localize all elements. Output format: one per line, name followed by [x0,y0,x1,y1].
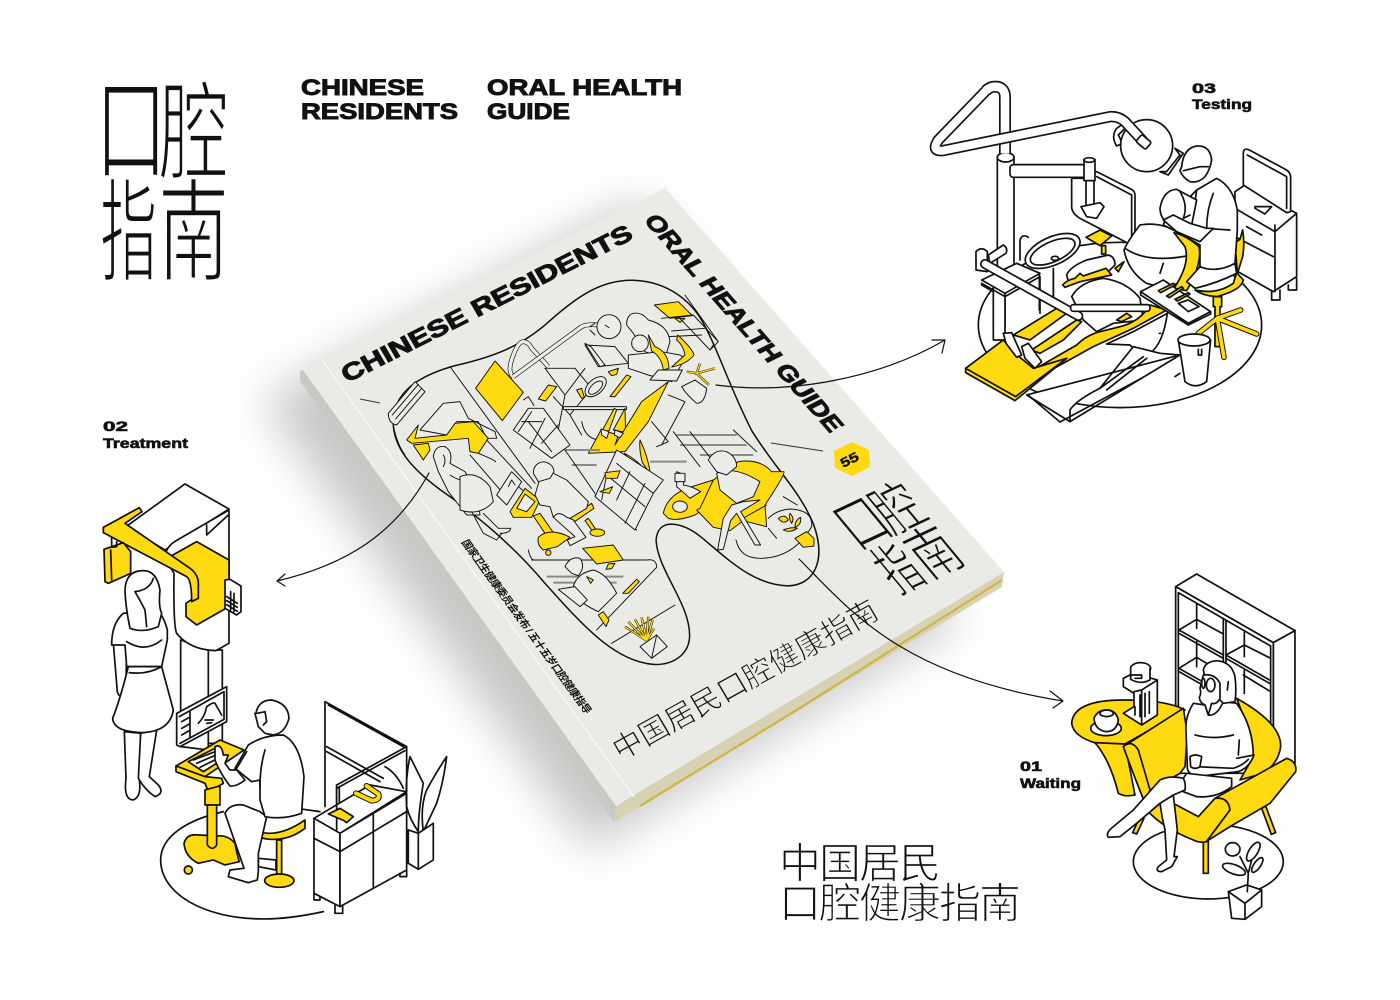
logo: 口腔指南: 指 [100,171,157,296]
lower cabinet [513,408,570,458]
book page edge highlight [640,580,1002,806]
heading: Chinese Residents: CHINESE [301,75,424,100]
stool backrest [1232,230,1244,274]
book mockup [300,188,1004,822]
testing middle parts [1013,146,1257,371]
patient head [632,335,648,352]
illustration: 03 testing scene [935,87,1297,422]
cloud base [538,532,570,550]
cover title: Oral Health Guide: ORAL HEALTH GUIDE [638,211,849,436]
lamp holder [590,323,609,335]
woman body [1186,702,1253,777]
bar column [976,249,987,272]
tooth outline [393,280,819,665]
yellow star inner [687,363,715,385]
label: 01 Waiting: Waiting [1020,775,1081,791]
arrow to 03 testing [716,340,945,388]
feet [601,429,623,438]
cabinet [314,785,407,913]
woman line [443,455,467,480]
pedestal [533,513,555,538]
glass post front [336,785,338,830]
woman legs [472,512,511,540]
yellow card [328,808,353,823]
plant fan [625,617,654,641]
label: 02 Treatment: 02 [103,418,128,434]
yellow desk [510,488,540,517]
cube shelf lines [602,463,653,523]
stool [570,503,597,533]
illustration: 01 waiting scene [1072,574,1296,919]
waiting background items [1072,574,1295,899]
pot line [652,635,657,658]
cover logo: 口腔指南 [820,470,977,606]
pedestal [205,786,220,805]
yellow U object [356,786,379,801]
dental arm top [513,325,605,377]
lamp joint [1136,134,1151,150]
cover badge: 55 [834,442,870,476]
testing back parts [935,87,1297,408]
xray box yellow [413,443,430,460]
body lower [628,352,685,382]
doctor pants [1187,263,1237,288]
stool legs [1198,310,1257,357]
yellow legs [602,408,626,432]
bottom Chinese title: 中国居民 [779,840,941,887]
dental arm top inner [513,325,605,377]
plant yellow [624,440,651,476]
hands [215,746,245,786]
flower [778,513,801,531]
yellow monitor [654,302,692,318]
chair left panel [1123,708,1187,800]
yellow arm rest [1063,262,1124,287]
arrow to 02 treatment [277,473,429,586]
side tray [1141,280,1211,325]
glasses left [1202,678,1205,688]
torso lines [1125,248,1187,273]
bottom monitor [583,545,623,564]
label: 02 Treatment [103,418,188,451]
book spine edge [300,370,616,822]
basin inner [586,379,605,397]
yellow box [538,385,557,401]
doctor head [533,462,554,482]
gray shelf lines [565,435,753,465]
xray-side panel [497,472,522,505]
yellow crossbar [103,508,198,602]
horizontal bar [1071,305,1150,311]
arm post [1081,158,1104,218]
small yellow tray [1086,230,1112,254]
waiting chair [697,461,784,531]
floor lines [518,430,757,643]
label: 03 Testing [1192,80,1252,112]
wheel [184,866,192,874]
lamp [597,315,621,339]
post [585,343,605,367]
grinder [677,472,701,498]
waiting woman [717,471,760,503]
sink [1020,226,1085,310]
doctor hand [1163,215,1213,242]
bin [1175,334,1211,386]
woman head [708,451,737,475]
treatment machine and woman [103,484,323,919]
waiting chair and woman [1107,661,1296,873]
label: 03 Testing: Testing [1192,96,1252,112]
cover title: Chinese Residents: CHINESE RESIDENTS [336,220,638,388]
tray monitor [585,345,628,367]
arrow to 01 waiting [799,559,1063,708]
treatment desk and doctor [176,687,407,913]
horizontal arm [1010,165,1087,177]
book page edge [614,572,1004,822]
coffee machine [675,473,685,482]
machine yellow block [170,542,229,625]
lamp head [1114,120,1183,175]
logo: 口腔指南: 腔 [159,75,229,195]
dental arm inner [510,342,548,377]
book shadow [262,200,960,850]
floor circle [978,242,1262,408]
machine body [126,484,229,651]
floor lines [392,295,718,483]
cube shelf [595,450,663,530]
monitor stand [675,318,685,322]
logo: 口腔指南: 口 [95,67,167,195]
panel art [508,480,515,487]
bin [682,380,707,403]
cover hinge line [322,360,634,797]
heading: Oral Health Guide: GUIDE [487,99,570,124]
floor circle [1133,824,1283,899]
doctor [627,313,670,358]
doctor mask [1183,167,1208,171]
keyboard [517,494,535,512]
cover logo: 口腔指南: 腔 [858,474,940,545]
bottom person [573,570,617,612]
person head [565,558,583,576]
crossed leg [1107,777,1185,837]
hair [1203,661,1236,703]
heading: Oral Health Guide: ORAL HEALTH [487,75,682,100]
logo: 口腔指南 [95,67,229,296]
stool stem [1213,297,1222,347]
stool legs inner [1198,310,1257,357]
chair back [1237,698,1281,780]
patient lap [1072,278,1143,332]
woman standing [433,446,480,515]
yellow star [687,363,715,385]
yellow panel [476,361,523,421]
chair seat [1147,798,1230,842]
cover logo: 口腔指南: 南 [892,516,977,590]
cover vertical subtitle: 国家卫生健康委员会发布 / 五十五岁口腔健康指导 [458,537,595,716]
basin [581,373,610,401]
yellow band [648,335,669,370]
legs [225,805,267,883]
column lines [181,640,222,750]
waiting table [663,480,713,519]
wheel [546,550,551,555]
cup [1190,755,1202,768]
patient hair line [1180,192,1190,218]
stool base [590,529,605,536]
head [255,700,289,735]
bottom shelves [547,577,623,583]
yellow curved band [1174,233,1200,291]
testing front parts [966,245,1211,422]
teapot [1091,710,1121,736]
skirt [1183,773,1232,797]
head holder [104,538,131,583]
plant [385,757,447,869]
yellow pot [795,532,814,547]
seated doctor [535,473,588,518]
cover badge: 55: 55 [838,449,861,471]
face [1199,675,1220,715]
back shoe [258,858,276,870]
lower base extension [1028,378,1142,422]
frame [545,368,592,455]
tray [650,370,682,381]
triangular arm vertical [986,87,1005,153]
label: 01 Waiting: 01 [1020,758,1042,774]
bottom Chinese title [779,840,1021,927]
heading: Chinese Residents: RESIDENTS [301,99,458,124]
person arm [558,587,587,607]
patient torso [1124,224,1200,285]
head lines [257,712,267,725]
chair wave [1033,305,1167,371]
cover illustration upper [388,295,718,515]
triangular arm vertical inner [986,87,1005,153]
cover logo: 口腔指南: 口 [820,486,906,561]
label: 02 Treatment: Treatment [103,435,188,451]
grinder [1123,663,1157,725]
triangular arm inner [935,91,1145,151]
cover illustration lower [460,430,814,658]
hook [523,397,534,406]
label: 01 Waiting [1020,758,1081,791]
control panel [225,579,241,615]
chair body [582,395,685,447]
monitor stand [606,563,615,569]
bottom Chinese title: 口腔健康指南 [779,880,1021,927]
chair line [740,497,797,538]
floor circle [161,809,323,919]
teapot [673,501,687,512]
body lines [237,750,265,787]
base stem [207,805,217,848]
chair under [1107,313,1167,354]
yellow leg stripes [1013,308,1067,340]
cover title in Chinese: 中国居民口腔健康指南 [607,595,884,767]
floor curve [736,509,812,558]
glasses [1206,678,1215,692]
woman [112,571,173,800]
foot bits [1117,313,1132,322]
column [993,153,1014,327]
tie [587,577,593,583]
radiator [388,382,425,425]
doctor body [1163,178,1237,269]
long bar [985,264,1078,316]
illustration: 02 treatment scene [103,484,447,919]
console [176,740,244,792]
patient arm [1067,255,1115,282]
flower [1221,840,1265,919]
footrest [966,340,1067,401]
cabinet [1235,185,1297,300]
stool [253,820,305,887]
patient head [1160,189,1197,228]
platform [982,263,1053,340]
shelf [662,315,718,350]
book cover [303,188,1004,806]
xray box [420,402,497,438]
stool seat [1195,273,1243,297]
screen [177,687,227,747]
hair line [1227,682,1228,690]
woman legs [718,500,761,550]
body lines [1195,735,1254,768]
doctor body [235,735,304,818]
xray column [470,440,532,492]
logo: 口腔指南: 南 [158,170,229,296]
cover mark right [771,443,823,451]
tube [563,407,627,410]
cover mark left [360,399,380,403]
yellow leg stripe 2 [1032,320,1082,353]
yellow hook [672,335,694,367]
label: 03 Testing: 03 [1192,80,1216,96]
bookshelf [1176,574,1295,773]
back leg [1157,795,1177,872]
xray yellow [407,422,488,453]
under dot [1159,332,1161,334]
glass panel [325,702,407,830]
heading: Oral Health Guide [487,75,682,124]
small yellow book [623,579,639,593]
chair right arm [1207,758,1296,841]
chair base [1027,347,1180,422]
back monitor [1243,149,1291,214]
yellow bracket [577,368,631,398]
doctor lines [1193,190,1230,230]
dental arm [510,342,548,377]
woman skirt [460,475,493,512]
cabinet lines [518,412,558,452]
doctor legs [553,514,586,546]
triangular arm [935,91,1145,151]
shelf yellow [600,471,620,493]
cloud base [184,835,239,865]
table [1072,700,1185,796]
shoes [1003,333,1042,368]
plant pot [640,635,667,658]
bar joint [988,245,1007,263]
long bar inner [985,264,1078,316]
chair left arm [1123,744,1150,803]
yellow footrest [588,382,668,453]
tray monitor [1072,172,1135,244]
cover logo: 口腔指南: 指 [860,534,937,605]
doctor hair [1180,146,1212,182]
chair legs [1133,806,1276,873]
yellow tag [598,612,609,627]
heading: Chinese Residents [301,75,458,124]
